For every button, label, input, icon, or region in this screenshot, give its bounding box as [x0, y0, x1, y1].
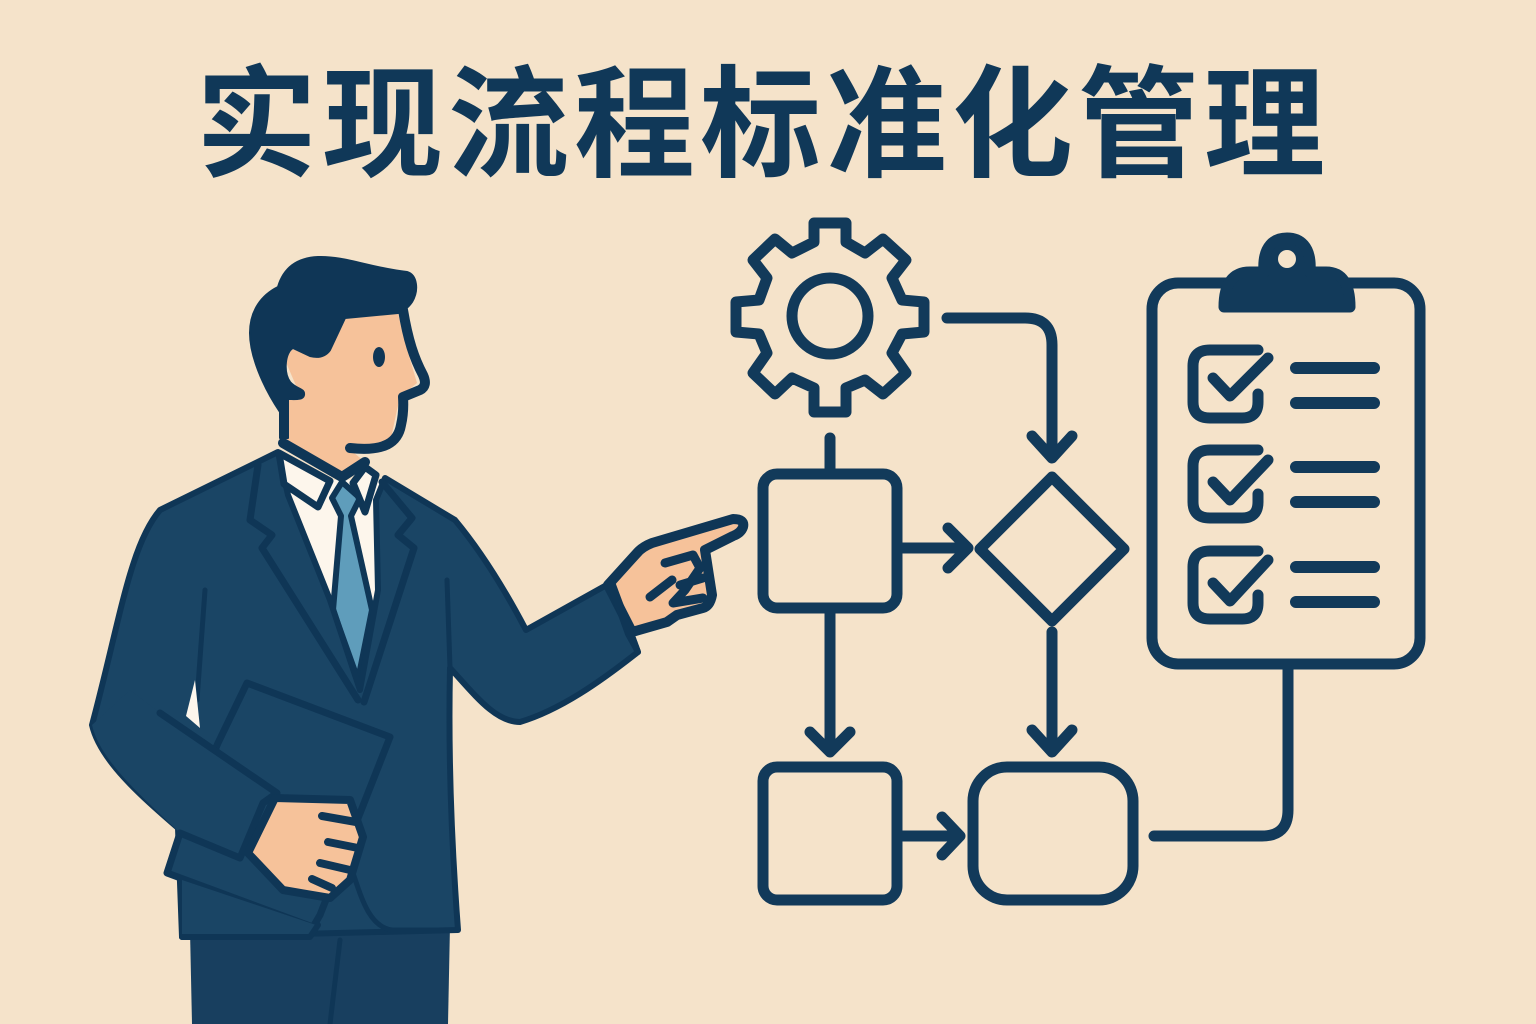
hem line: [182, 925, 318, 937]
holding hand: [248, 798, 363, 898]
hand finger lines: [312, 816, 358, 888]
eye: [373, 347, 385, 367]
collar: [279, 453, 376, 512]
checklist item 2: [1193, 450, 1374, 518]
icon: gear: [736, 223, 924, 412]
arrow: box to diamond: [902, 528, 968, 568]
arrow: gear to decision: [947, 318, 1072, 458]
connector: end box to clipboard: [1154, 668, 1288, 836]
flowchart: [736, 223, 1420, 900]
decision diamond: [980, 477, 1124, 621]
arm sleeve: [92, 690, 277, 860]
tie: [332, 482, 372, 680]
pointing hand: [608, 519, 743, 632]
checklist item 3: [1193, 551, 1374, 619]
suit jacket: [92, 452, 638, 937]
shirt: [284, 480, 380, 690]
icon: clipboard: [1152, 238, 1420, 664]
illustration: businessman: [92, 257, 743, 1024]
jacket cuff: [610, 582, 638, 652]
checklist item 1: [1193, 350, 1374, 418]
trousers: [190, 925, 450, 1024]
process box top: [763, 474, 897, 608]
hair: [250, 257, 416, 438]
arm gap: [186, 680, 200, 728]
jacket seams: [197, 580, 455, 930]
process box bottom: [763, 767, 897, 900]
face outline: [283, 310, 425, 477]
lapels: [250, 465, 414, 702]
rounded end box: [973, 767, 1133, 900]
sleeve outline: [160, 713, 277, 858]
neck and face: [285, 313, 417, 475]
title: 实现流程标准化管理: [196, 57, 1330, 193]
arrow: box down: [810, 612, 850, 752]
connector: gear to process box: [824, 438, 836, 470]
folder: [167, 683, 390, 927]
finger lines: [650, 555, 703, 603]
folder lower fill: [182, 880, 316, 937]
clipboard clip: [1224, 238, 1350, 307]
arrow: bottom box to end box: [902, 817, 960, 855]
arrow: diamond down: [1032, 632, 1072, 752]
